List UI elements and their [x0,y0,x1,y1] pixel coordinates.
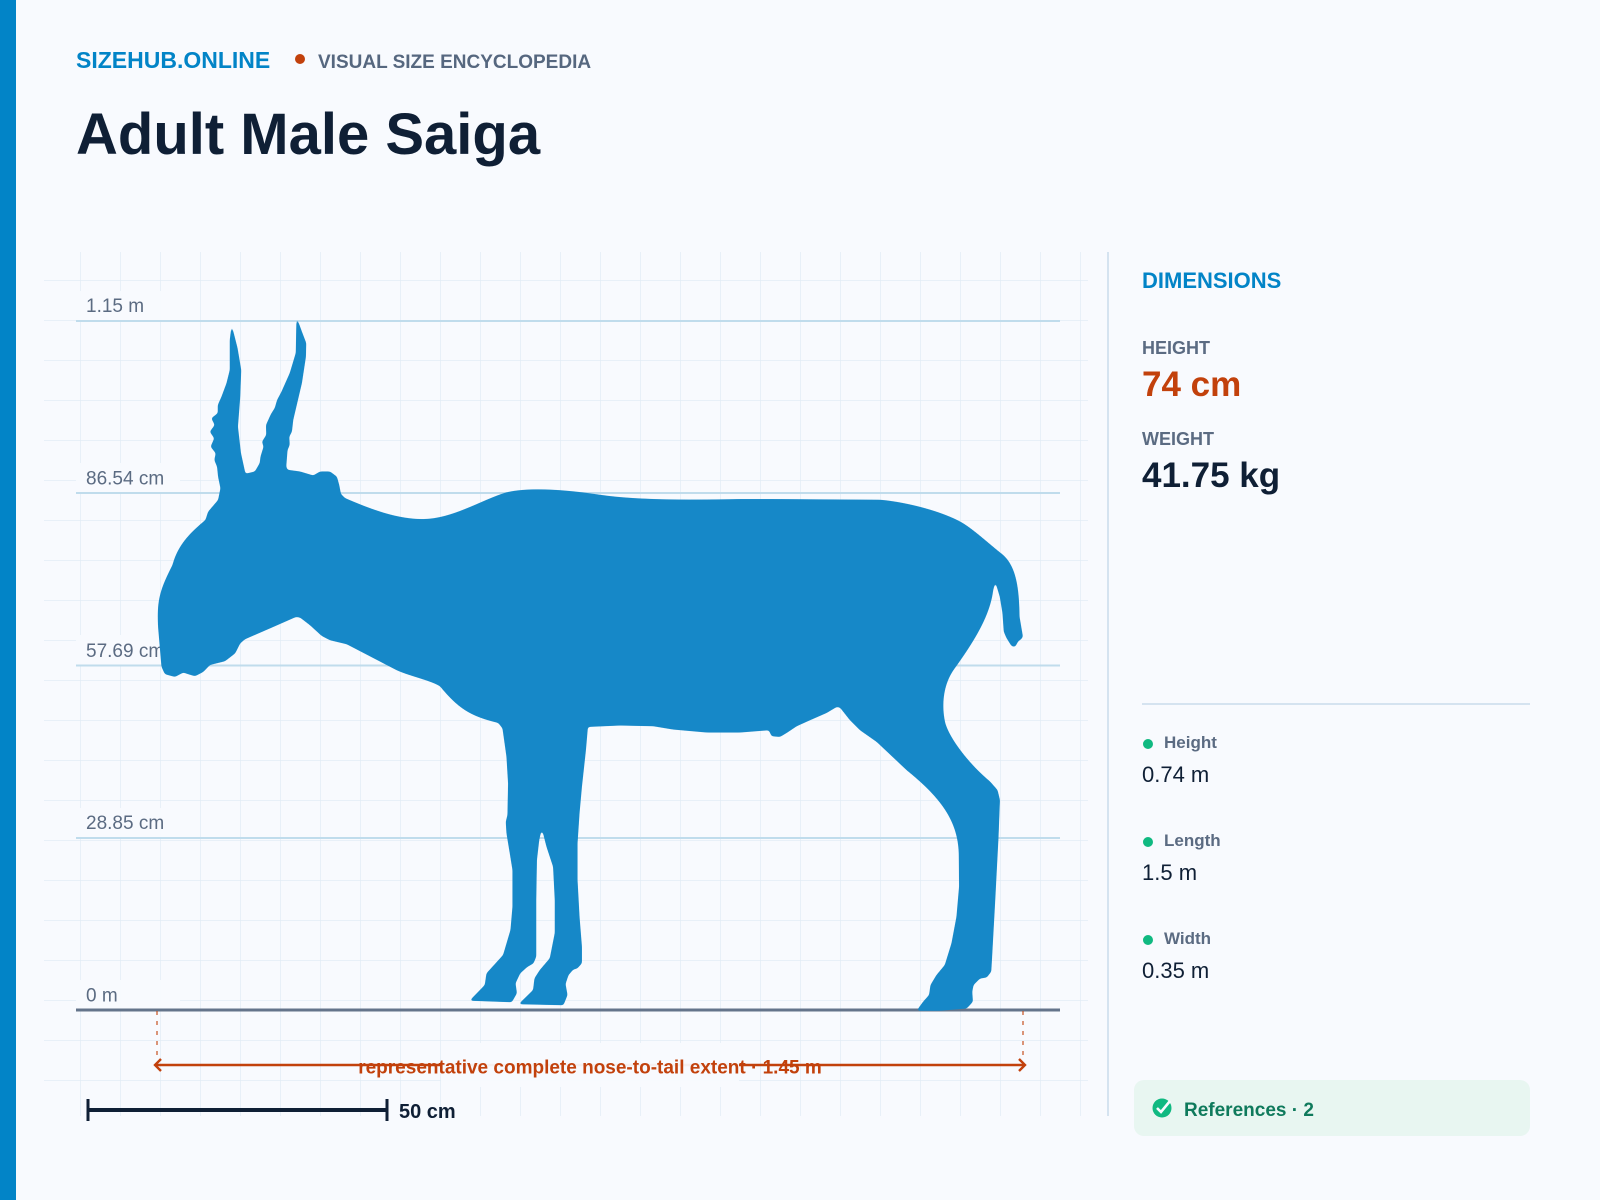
saiga silhouette [158,318,1023,1010]
length row: 1.5 m [1142,860,1197,885]
references callout: References · 2 [1184,1100,1314,1121]
header [76,47,591,167]
height stat [1142,338,1241,404]
panel: dimensions [1134,268,1530,1136]
width row: 0.35 m [1142,958,1209,983]
tagline: VISUAL SIZE ENCYCLOPEDIA [318,52,591,73]
icon: check badge [1152,1098,1172,1118]
height row [1142,733,1217,787]
height stat: 74 cm [1142,365,1241,404]
height labels [86,296,164,1006]
label masks [76,291,180,1010]
scale bar: 50 cm [399,1101,456,1123]
extent label: representative complete nose-to-tail extent · 1.45 m [358,1058,822,1078]
brand name: SIZEHUB.ONLINE [76,47,270,73]
chart: size comparison [76,291,1060,1123]
length row [1142,831,1221,885]
weight stat [1142,429,1280,495]
height row: 0.74 m [1142,762,1209,787]
references callout [1134,1080,1530,1136]
height stat: HEIGHT [1142,338,1210,358]
separator dot [295,54,305,64]
height labels: 0 m [86,986,118,1006]
width row: Width [1164,929,1211,948]
height row: Height [1164,733,1217,752]
length row: Length [1164,831,1221,850]
extent label [358,1043,822,1087]
weight stat: WEIGHT [1142,429,1214,449]
ground line [76,1008,1060,1012]
scale bar [86,1099,456,1123]
extent arrow [155,1059,1025,1071]
side panel divider [1107,252,1109,1116]
panel heading: DIMENSIONS [1142,268,1281,293]
height reference lines [76,321,1060,838]
weight stat: 41.75 kg [1142,456,1280,495]
height labels: 1.15 m [86,296,144,317]
extent dotted guides [157,1011,1023,1060]
title: Adult Male Saiga [76,102,541,167]
accent strip [0,0,16,1200]
height labels: 86.54 cm [86,468,164,490]
height labels: 28.85 cm [86,813,164,834]
width row [1142,929,1211,983]
height labels: 57.69 cm [86,641,164,662]
